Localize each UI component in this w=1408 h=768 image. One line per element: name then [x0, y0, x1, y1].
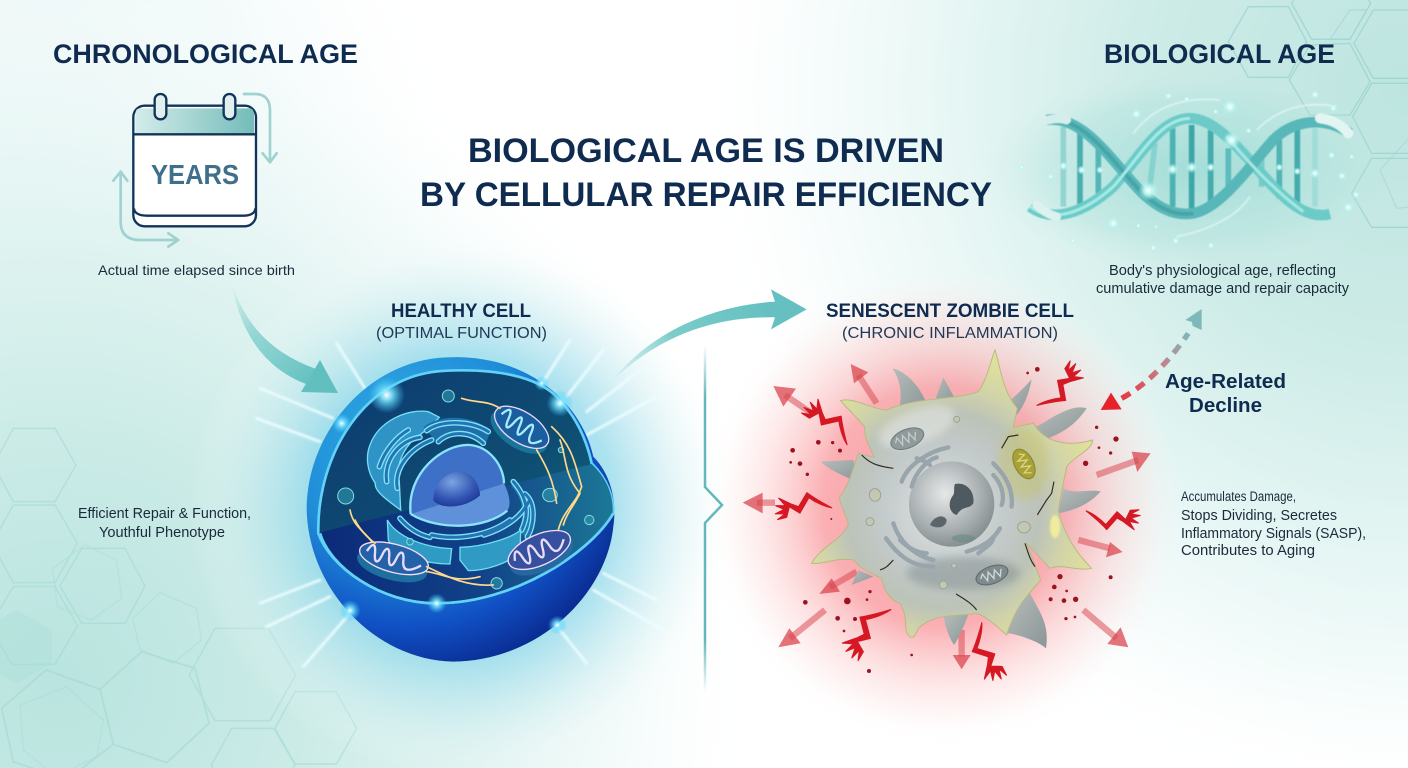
label: senescent zombie cell [826, 301, 1074, 342]
inflammatory particles [789, 367, 1119, 673]
text: senescent cell description: Inflammatory Signals (SASP), [1181, 526, 1366, 542]
energy filaments [350, 398, 582, 585]
label: healthy cell [376, 301, 547, 342]
icon: DNA double helix [983, 70, 1397, 270]
cycle arrows around calendar [113, 94, 277, 247]
cell body [812, 350, 1093, 637]
mitochondria [888, 424, 1040, 589]
main title: BIOLOGICAL AGE IS DRIVEN [468, 132, 944, 170]
text: senescent cell description: Accumulates Damage, [1181, 489, 1296, 504]
text: healthy cell description: Youthful Phenotype [99, 525, 225, 541]
label: senescent zombie cell: SENESCENT ZOMBIE CELL [826, 301, 1074, 322]
arrow: healthy cell to senescent cell [610, 289, 807, 383]
label: senescent zombie cell: (CHRONIC INFLAMMATION) [842, 325, 1058, 342]
mitochondria [354, 397, 579, 589]
red lightning signals [774, 360, 1141, 685]
main title: BY CELLULAR REPAIR EFFICIENCY [420, 176, 992, 214]
text: healthy cell description: Efficient Repair & Function, [78, 506, 251, 522]
icon: calendar labelled years: YEARS [151, 159, 239, 190]
main title [420, 132, 992, 214]
vesicles [866, 416, 1030, 589]
label: age-related decline: Age-Related [1165, 371, 1286, 393]
hexagon pattern: bottom left [0, 428, 357, 768]
label: healthy cell: HEALTHY CELL [391, 301, 531, 322]
nucleus [909, 461, 994, 547]
text: biological age description: cumulative damage and repair capacity [1096, 281, 1350, 297]
membrane cracks [862, 435, 1054, 610]
nucleus [410, 445, 509, 526]
label: age-related decline [1165, 371, 1286, 417]
illustration: senescent zombie cell [703, 267, 1183, 747]
golgi stacks [886, 447, 1012, 567]
outward inflammation arrows [743, 364, 1151, 669]
light rays [257, 340, 663, 667]
divider with chevron [705, 345, 722, 692]
text: senescent cell description [1181, 489, 1366, 559]
text: senescent cell description: Stops Dividing, Secretes [1181, 508, 1337, 524]
icon: calendar labelled years [113, 94, 277, 247]
rim highlights [332, 376, 573, 634]
grey back spikes [821, 368, 1101, 648]
endoplasmic reticulum [367, 411, 533, 571]
label: healthy cell: (OPTIMAL FUNCTION) [376, 325, 547, 342]
text: healthy cell description [78, 506, 251, 541]
text: senescent cell description: Contributes to Aging [1181, 543, 1315, 559]
text: chronological age description: Actual time elapsed since birth [98, 262, 295, 278]
heading: chronological age: CHRONOLOGICAL AGE [53, 39, 358, 69]
text: biological age description: Body's physiological age, reflecting [1109, 263, 1336, 279]
heading: biological age: BIOLOGICAL AGE [1104, 39, 1335, 69]
illustration: healthy cell [187, 233, 733, 768]
arrow: age-related decline dashed double arrow [1101, 309, 1202, 410]
text: biological age description [1096, 263, 1350, 297]
hexagon pattern: top right [1228, 0, 1408, 227]
label: age-related decline: Decline [1189, 395, 1262, 417]
arrow: chronological age to healthy cell [232, 284, 338, 393]
vesicles [338, 390, 594, 589]
